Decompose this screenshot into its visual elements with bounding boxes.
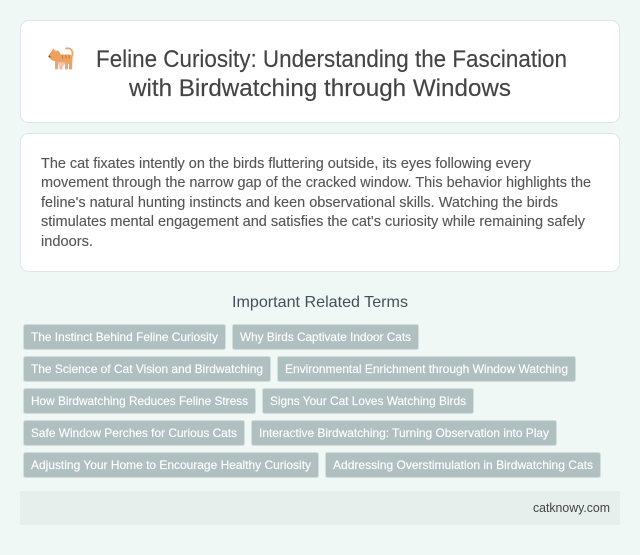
tag xyxy=(232,324,418,350)
tag xyxy=(24,420,244,446)
title text: Feline Curiosity: Understanding the Fascination xyxy=(96,46,567,73)
footer xyxy=(20,491,620,525)
heading: important related terms: Important Related Terms xyxy=(232,294,408,311)
description text: The cat fixates intently on the birds fluttering outside, its eyes following every xyxy=(41,156,532,172)
panel: description xyxy=(20,134,620,272)
description text: movement through the narrow gap of the cracked window. This behavior highlights the xyxy=(41,175,591,191)
description text: stimulates mental engagement and satisfies the cat's curiosity while remaining safely xyxy=(41,214,586,230)
tag: Addressing Overstimulation in Birdwatching Cats xyxy=(333,458,593,472)
tag xyxy=(252,420,556,446)
title text: with Birdwatching through Windows xyxy=(128,75,511,102)
tag xyxy=(24,356,270,382)
description text: indoors. xyxy=(41,234,93,250)
tag xyxy=(278,356,576,382)
icon: cat xyxy=(48,48,72,70)
tag: The Instinct Behind Feline Curiosity xyxy=(31,330,218,344)
description text: feline's natural hunting instincts and keen observational skills. Watching the birds xyxy=(41,195,558,211)
tag: The Science of Cat Vision and Birdwatching xyxy=(31,362,263,376)
tag: Interactive Birdwatching: Turning Observation into Play xyxy=(259,426,549,440)
tag: How Birdwatching Reduces Feline Stress xyxy=(31,394,248,408)
tag list xyxy=(24,324,600,478)
footer: catknowy.com xyxy=(533,500,610,515)
tag xyxy=(24,324,226,350)
tag: Adjusting Your Home to Encourage Healthy Curiosity xyxy=(31,458,311,472)
tag xyxy=(262,388,474,414)
tag xyxy=(24,452,318,478)
description text xyxy=(41,156,591,250)
tag xyxy=(24,388,256,414)
tag xyxy=(326,452,600,478)
tag: Safe Window Perches for Curious Cats xyxy=(31,426,237,440)
tag: Environmental Enrichment through Window Watching xyxy=(285,362,568,376)
panel: title card xyxy=(20,20,620,122)
tag: Signs Your Cat Loves Watching Birds xyxy=(270,394,466,408)
tag: Why Birds Captivate Indoor Cats xyxy=(240,330,411,344)
title text xyxy=(96,46,567,102)
